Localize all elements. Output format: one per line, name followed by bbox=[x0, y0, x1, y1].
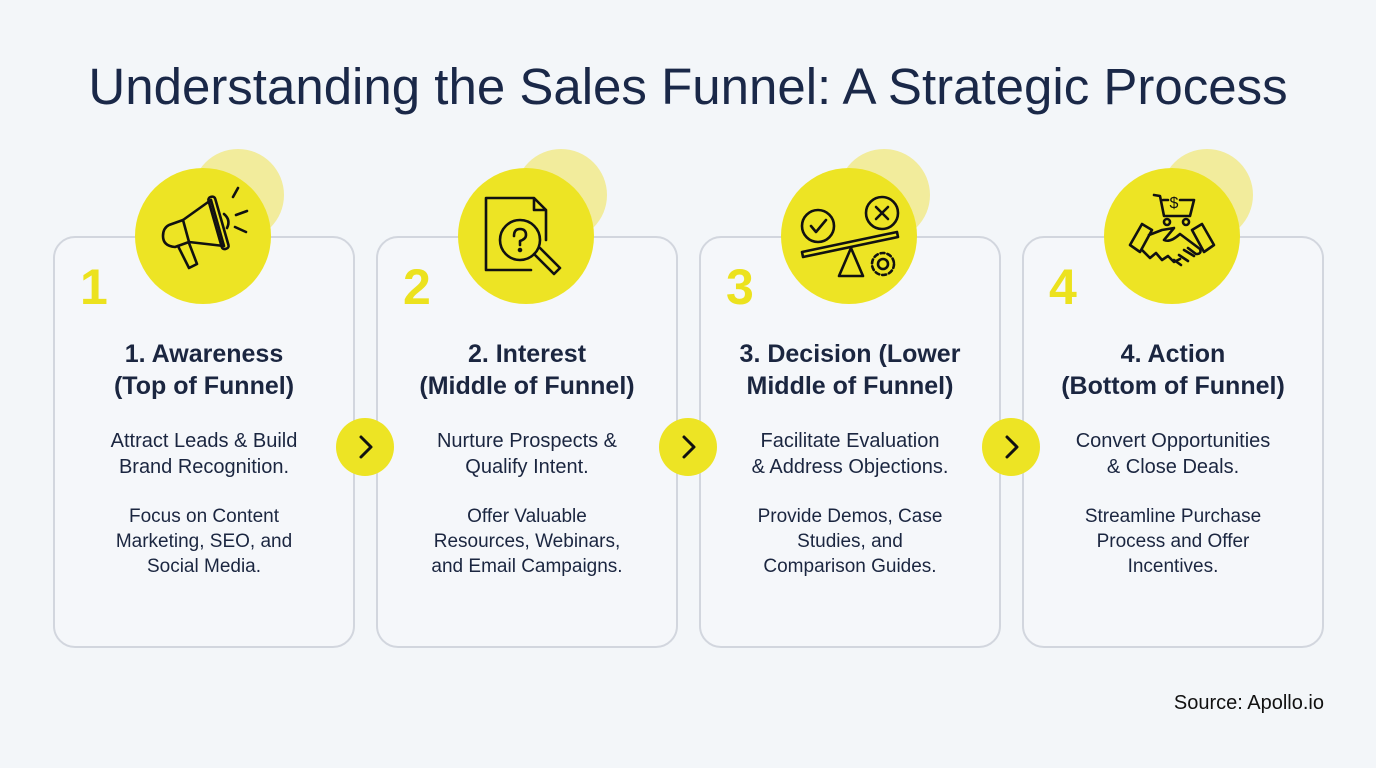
heading interest: 2. Interest bbox=[468, 340, 586, 368]
heading awareness: (Top of Funnel) bbox=[114, 372, 294, 400]
number 4: 4 bbox=[1049, 259, 1077, 315]
panel: awareness bbox=[53, 236, 355, 648]
text awareness detail: Social Media. bbox=[147, 556, 261, 577]
arrow 1 bbox=[336, 418, 394, 476]
text awareness main: Attract Leads & Build bbox=[111, 430, 297, 452]
icon: handshake cart bbox=[1104, 149, 1253, 304]
text decision main: & Address Objections. bbox=[752, 456, 948, 478]
heading decision bbox=[740, 340, 960, 400]
text awareness main bbox=[110, 430, 297, 478]
text decision main: Facilitate Evaluation bbox=[760, 430, 939, 452]
source: Source: Apollo.io bbox=[1174, 692, 1324, 714]
heading interest bbox=[419, 340, 635, 400]
text action detail: Streamline Purchase bbox=[1085, 506, 1261, 527]
heading action: (Bottom of Funnel) bbox=[1061, 372, 1285, 400]
heading awareness: 1. Awareness bbox=[125, 340, 283, 368]
text interest detail bbox=[431, 506, 623, 577]
number 3: 3 bbox=[726, 259, 754, 315]
text action main: Convert Opportunities bbox=[1076, 430, 1270, 452]
text decision detail: Provide Demos, Case bbox=[758, 506, 942, 527]
text interest detail: Resources, Webinars, bbox=[434, 531, 620, 552]
text interest main: Qualify Intent. bbox=[465, 456, 589, 478]
text action detail: Incentives. bbox=[1128, 556, 1218, 577]
arrow 3 bbox=[982, 418, 1040, 476]
icon: megaphone bbox=[135, 149, 284, 304]
icon: handshake cart: $ bbox=[1170, 195, 1179, 212]
heading awareness bbox=[114, 340, 294, 400]
text decision detail: Comparison Guides. bbox=[763, 556, 937, 577]
panel: decision bbox=[699, 236, 1001, 648]
text interest main: Nurture Prospects & bbox=[437, 430, 617, 452]
text awareness detail: Marketing, SEO, and bbox=[116, 531, 292, 552]
title: Understanding the Sales Funnel: A Strategic Process bbox=[88, 58, 1288, 115]
text awareness main: Brand Recognition. bbox=[119, 456, 289, 478]
text decision main bbox=[752, 430, 948, 478]
text interest main bbox=[437, 430, 617, 478]
icon: scale decision bbox=[781, 149, 930, 304]
heading action bbox=[1061, 340, 1285, 400]
text interest detail: and Email Campaigns. bbox=[431, 556, 623, 577]
text action main: & Close Deals. bbox=[1107, 456, 1239, 478]
text interest detail: Offer Valuable bbox=[467, 506, 587, 527]
number 1: 1 bbox=[80, 259, 108, 315]
text action detail bbox=[1085, 506, 1261, 577]
heading decision: 3. Decision (Lower bbox=[740, 340, 960, 368]
panel: action bbox=[1022, 236, 1324, 648]
panel: interest bbox=[376, 236, 678, 648]
text awareness detail: Focus on Content bbox=[129, 506, 279, 527]
text action detail: Process and Offer bbox=[1097, 531, 1249, 552]
heading action: 4. Action bbox=[1121, 340, 1225, 368]
text awareness detail bbox=[116, 506, 292, 577]
arrow 2 bbox=[659, 418, 717, 476]
text decision detail bbox=[758, 506, 942, 577]
icon: document search bbox=[458, 149, 607, 304]
heading decision: Middle of Funnel) bbox=[747, 372, 953, 400]
heading interest: (Middle of Funnel) bbox=[419, 372, 635, 400]
number 2: 2 bbox=[403, 259, 431, 315]
text action main bbox=[1076, 430, 1270, 478]
text decision detail: Studies, and bbox=[797, 531, 903, 552]
